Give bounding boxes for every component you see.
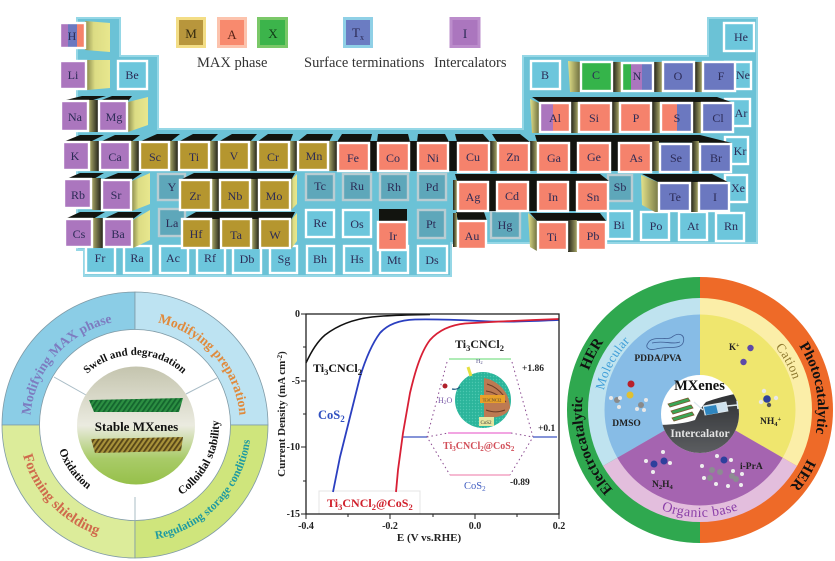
centre circle	[77, 366, 195, 484]
element: Zr	[180, 180, 211, 210]
element: Zn	[498, 143, 529, 172]
periodic table base	[77, 18, 757, 276]
element: V: V	[230, 149, 239, 163]
recessed cells: Ne	[736, 68, 750, 82]
recessed cells: Ra	[130, 251, 144, 265]
label: Forming shielding: Forming shielding	[23, 452, 100, 537]
crystal: gold layer	[91, 437, 183, 453]
element: Li	[60, 61, 86, 89]
label: HER right: HER	[790, 459, 816, 490]
recessed cells: Be	[125, 68, 139, 82]
element: Al	[540, 103, 570, 132]
element: Nb	[220, 180, 250, 210]
recessed cells: Hg	[498, 218, 512, 232]
element: Mn: Mn	[306, 149, 322, 163]
recessed cells: Rh	[387, 180, 401, 194]
element: V	[219, 142, 249, 170]
label: Regulating storage conditions: Regulating storage conditions	[154, 440, 250, 540]
element: Hf: Hf	[190, 227, 202, 241]
element: Co	[378, 143, 409, 171]
label: HER left: HER	[580, 339, 604, 370]
element: As: As	[629, 151, 643, 165]
icon: i-PrA molecule	[700, 454, 744, 488]
icon: N2H4 molecule	[644, 450, 672, 474]
element: N: N	[633, 69, 642, 83]
hub label: MXenes: MXenes	[674, 378, 725, 394]
element: Na	[61, 101, 88, 131]
recessed cells: Kr	[734, 144, 746, 158]
element: Ge	[578, 143, 610, 172]
y axis title: -2	[276, 354, 284, 361]
y axis title: )	[276, 351, 288, 355]
curve label: Ti3CNCl2: Ti	[313, 361, 324, 375]
recessed cells: Fr	[95, 251, 105, 265]
curve: Ti3CNCl2@CoS2	[396, 319, 559, 492]
element: In	[538, 182, 568, 211]
label: N2H4: 2	[659, 484, 662, 491]
element: I	[699, 183, 729, 211]
element: Ir	[378, 222, 407, 250]
element: Mg	[99, 101, 127, 131]
element: W: W	[269, 228, 281, 242]
label: Molecular: Molecular	[596, 337, 629, 390]
element: Li: Li	[68, 68, 79, 82]
element: Ta	[221, 219, 251, 248]
element: Te: Te	[669, 190, 681, 204]
element: Pb: Pb	[587, 229, 599, 243]
label: PDDA/PVA: PDDA/PVA	[634, 354, 682, 364]
centre hub	[661, 375, 739, 453]
inset label: H2: 2	[480, 360, 483, 365]
curve label: Ti3CNCl2@CoS2: Ti	[327, 496, 338, 510]
element: Si	[579, 103, 611, 132]
recessed cells: At	[687, 219, 700, 233]
element: Cu	[458, 143, 489, 172]
element: In: In	[548, 190, 558, 204]
element: Zn: Zn	[506, 150, 520, 164]
element: Nb: Nb	[228, 189, 242, 203]
recessed cells: Bi	[613, 218, 625, 232]
curve: Ti3CNCl2	[306, 314, 430, 363]
label: K+: K	[729, 342, 736, 352]
element: Ni	[418, 143, 448, 171]
crystal: green layer	[89, 398, 183, 412]
recessed cells: Po	[650, 219, 662, 233]
inset dotted band diagram	[403, 359, 557, 475]
element: Ga	[538, 143, 569, 172]
element: Mo: Mo	[266, 189, 282, 203]
chart axes	[301, 314, 559, 519]
element: Cr	[258, 142, 289, 170]
element: Zr: Zr	[189, 189, 201, 203]
element: Al: Al	[549, 111, 562, 125]
y tick labels: 0	[295, 309, 300, 320]
element: Sn: Sn	[587, 190, 599, 204]
outer ring	[567, 277, 833, 543]
label: N2H4: H	[662, 480, 670, 490]
recessed cells: Pt	[426, 217, 437, 231]
element: H	[60, 23, 85, 48]
recessed cells: He	[734, 30, 748, 44]
raised element cubes	[60, 23, 735, 250]
label: Oxidation: Oxidation	[60, 449, 90, 490]
element: Br: Br	[710, 151, 722, 165]
element: Tl: Ti	[547, 230, 558, 244]
curve label: Ti3CNCl2: CNCl	[328, 361, 358, 375]
legend swatch: M: M	[185, 26, 197, 41]
element: Mn	[298, 142, 328, 170]
y axis title: Current Density (mA cm	[276, 361, 288, 477]
element: Rb: Rb	[71, 188, 85, 202]
recessed cells: Mt	[387, 253, 402, 267]
recessed cells: Sb	[614, 180, 626, 194]
label: N2H4: N	[652, 480, 659, 490]
element: K: K	[71, 149, 80, 163]
inset label: Ti3CNCl2@CoS2: @CoS	[484, 441, 511, 452]
label: NH4+: 4	[774, 421, 778, 428]
element: Pb	[578, 222, 606, 250]
red label box	[319, 491, 420, 514]
value: -0.89: -0.89	[510, 478, 530, 488]
element: P	[620, 103, 651, 132]
element: Au: Au	[465, 229, 479, 243]
icon: K ions	[740, 345, 754, 365]
element: H: H	[68, 29, 77, 43]
element: O	[663, 62, 694, 91]
pale middle ring	[588, 298, 812, 522]
element: Sr	[102, 180, 131, 210]
core-shell sphere: Ti3CNCl2	[483, 398, 501, 402]
element: Na: Na	[68, 110, 83, 124]
element: Se	[660, 144, 691, 172]
element: Cd: Cd	[505, 189, 519, 203]
legend: surface terminations	[304, 18, 425, 71]
label: Cation: Cation	[777, 344, 798, 380]
legend: M A X phase	[178, 18, 286, 71]
element: Tl	[538, 222, 567, 250]
element: Ge: Ge	[587, 150, 601, 164]
element: Rb	[64, 179, 91, 208]
inset title: CNCl	[470, 337, 500, 351]
element: O: O	[674, 69, 683, 83]
inset title: 2	[500, 343, 504, 353]
recessed cells: B	[541, 68, 549, 82]
element: Hf	[182, 219, 211, 248]
element: Ba: Ba	[111, 227, 125, 241]
inset label: Ti3CNCl2@CoS2: 3	[452, 445, 456, 453]
element: Ti: Ti	[189, 150, 200, 164]
recessed cells: Bh	[313, 252, 327, 266]
element: S: S	[674, 111, 680, 125]
recessed cells: Re	[313, 216, 327, 230]
element: Cl	[702, 103, 733, 132]
inset label: Ti3CNCl2@CoS2: CNCl	[456, 441, 480, 452]
label: Organic base: Organic base	[662, 502, 738, 518]
recessed cells: Rf	[204, 251, 216, 265]
legend swatch: Tx: x	[360, 33, 364, 42]
hub label: Intercalator: Intercalator	[670, 428, 730, 440]
inset title: 3	[466, 343, 470, 353]
panel: intercalator wheel	[567, 277, 833, 543]
element: P: P	[633, 111, 640, 125]
recessed cells: Db	[240, 252, 254, 266]
icon: MXene stacks	[668, 398, 694, 421]
element: Se: Se	[670, 151, 682, 165]
element: Cl: Cl	[712, 111, 724, 125]
element: N	[622, 63, 653, 91]
label: NH4+: NH	[760, 417, 774, 427]
legend swatch: I: I	[463, 26, 467, 41]
curve label: Ti3CNCl2@CoS2: 2	[408, 502, 413, 512]
element: Ir: Ir	[389, 229, 397, 243]
recessed cells	[86, 23, 754, 273]
recessed cells: Ac	[166, 251, 180, 265]
element: Cr: Cr	[267, 150, 279, 164]
sector: cation	[700, 314, 795, 458]
curve label: CoS2: CoS	[318, 408, 340, 422]
element: Si: Si	[589, 111, 600, 125]
legend label: Intercalators: Intercalators	[434, 55, 507, 71]
panel: periodic table	[60, 18, 757, 276]
core-shell sphere: CoS2	[480, 421, 492, 426]
inset label: H2O: O	[447, 396, 453, 405]
label: Swell and degradation: Swell and degradation	[84, 347, 186, 374]
x axis title: E (V vs.RHE)	[397, 532, 461, 544]
element: Co: Co	[386, 151, 400, 165]
label: Colloidal stability: Colloidal stability	[178, 420, 222, 494]
sector: organic base	[617, 410, 783, 505]
curve label: Ti3CNCl2: 3	[324, 367, 328, 377]
label: N2H4: 4	[670, 484, 674, 491]
y tick labels: -10	[287, 442, 300, 453]
label: Electrocatalytic: Electrocatalytic	[572, 396, 613, 496]
recessed cells: Sg	[278, 252, 290, 266]
inset label: Ti3CNCl2@CoS2: 2	[480, 445, 484, 453]
inset title: Ti	[455, 337, 466, 351]
recessed cells: Ru	[350, 179, 364, 193]
curve label: Ti3CNCl2@CoS2: @CoS	[376, 496, 409, 510]
element: Sc	[140, 142, 169, 170]
x tick labels: 0.0	[469, 521, 481, 532]
core-shell sphere	[442, 367, 511, 428]
label: DMSO: DMSO	[612, 419, 641, 429]
element: F	[703, 62, 735, 91]
curve: CoS2	[333, 319, 559, 492]
element: Ga: Ga	[547, 151, 562, 165]
y tick labels: -5	[292, 376, 300, 387]
legend swatch: Tx	[344, 18, 372, 46]
element: I: I	[713, 190, 717, 204]
element: Ti	[179, 142, 209, 170]
cube shadows and sides	[62, 21, 734, 252]
inset label: H2O: H	[438, 396, 444, 405]
label: K+: +	[736, 343, 740, 349]
recessed cells: Pd	[426, 180, 438, 194]
value: +1.86: +1.86	[522, 364, 544, 374]
label: Modifying preparation: Modifying preparation	[158, 314, 246, 416]
element: W	[260, 219, 290, 248]
label: Photocatalytic: Photocatalytic	[799, 340, 828, 434]
x tick labels: 0.2	[553, 521, 565, 532]
inset label: H2O: 2	[444, 400, 447, 406]
curve label: CoS2: 2	[340, 414, 345, 424]
element: Cd	[497, 182, 528, 211]
sector: molecular	[605, 314, 700, 458]
recessed cells: La	[166, 216, 179, 230]
element: As	[619, 143, 651, 172]
inset label: CoS2: 2	[482, 485, 486, 493]
icon: PDDA/PVA polymer	[647, 334, 684, 350]
element: C: C	[592, 68, 600, 82]
recessed cells: Tc	[314, 179, 326, 193]
recessed cells: Hs	[350, 252, 364, 266]
icon: NH4 molecule	[759, 389, 778, 407]
element: K	[63, 142, 89, 170]
element: Br	[700, 144, 731, 172]
element: Ni: Ni	[427, 151, 440, 165]
element: Fe: Fe	[347, 151, 359, 165]
recessed cells: Xe	[731, 181, 745, 195]
legend label: MAX phase: MAX phase	[197, 55, 267, 71]
recessed cells: Rn	[724, 219, 738, 233]
element: Mg: Mg	[106, 110, 122, 124]
inset label: Ti3CNCl2@CoS2: 2	[511, 445, 515, 453]
outer ring sectors	[2, 292, 268, 558]
curve label: Ti3CNCl2@CoS2: 2	[372, 502, 376, 512]
element: Mo	[259, 180, 290, 210]
element: Cu: Cu	[466, 150, 480, 164]
label: NH4+: +	[778, 416, 782, 423]
element: S	[661, 103, 692, 132]
element: Au	[458, 221, 486, 249]
x tick labels: -0.4	[298, 521, 314, 532]
label: Modifying MAX phase: Modifying MAX phase	[22, 316, 112, 416]
element: Ag: Ag	[466, 190, 480, 204]
y tick labels: -15	[287, 509, 300, 520]
curve label: Ti3CNCl2@CoS2: CNCl	[342, 496, 372, 510]
label: i-PrA: i-PrA	[740, 462, 763, 472]
value: +0.1: +0.1	[538, 424, 556, 434]
curve label: Ti3CNCl2: 2	[358, 367, 362, 377]
recessed cells: Os	[350, 217, 364, 231]
panel: stable MXenes wheel	[2, 292, 268, 558]
legend swatch: A: A	[227, 27, 237, 42]
element: F: F	[718, 69, 725, 83]
element: Cs: Cs	[73, 227, 86, 241]
recessed cells: Y	[168, 180, 177, 194]
element: Ca	[100, 142, 130, 170]
inset label: H2: H	[476, 359, 480, 365]
legend swatch: X: X	[268, 26, 278, 41]
element: Sn	[577, 182, 608, 211]
centre label: Stable MXenes	[95, 419, 178, 434]
curve label: Ti3CNCl2@CoS2: 3	[338, 502, 342, 512]
x tick labels	[298, 521, 565, 532]
element: Fe	[338, 143, 369, 171]
recessed cells: Ds	[425, 253, 439, 267]
element: Ba	[104, 219, 132, 247]
element: Ag	[458, 182, 488, 211]
element: Ta: Ta	[230, 228, 243, 242]
legend swatch: Tx: T	[352, 25, 360, 40]
legend label: Surface terminations: Surface terminations	[304, 55, 425, 71]
element: Sr: Sr	[111, 188, 121, 202]
inner white ring	[40, 330, 230, 520]
inset label: Ti3CNCl2@CoS2: Ti	[443, 441, 452, 452]
element: Sc: Sc	[149, 150, 161, 164]
y tick labels	[287, 309, 300, 520]
element: Te	[659, 183, 690, 211]
element: C	[581, 62, 612, 91]
element: Ca: Ca	[108, 150, 122, 164]
x tick labels: -0.2	[382, 521, 398, 532]
element: Cs	[65, 219, 92, 247]
icon: DMSO molecule	[609, 380, 648, 412]
inset label: CoS2: CoS	[464, 481, 482, 492]
panel: polarization chart	[276, 309, 565, 544]
icon: syringe	[694, 401, 738, 415]
legend: intercalators	[434, 18, 507, 71]
recessed cells: Ar	[735, 106, 747, 120]
